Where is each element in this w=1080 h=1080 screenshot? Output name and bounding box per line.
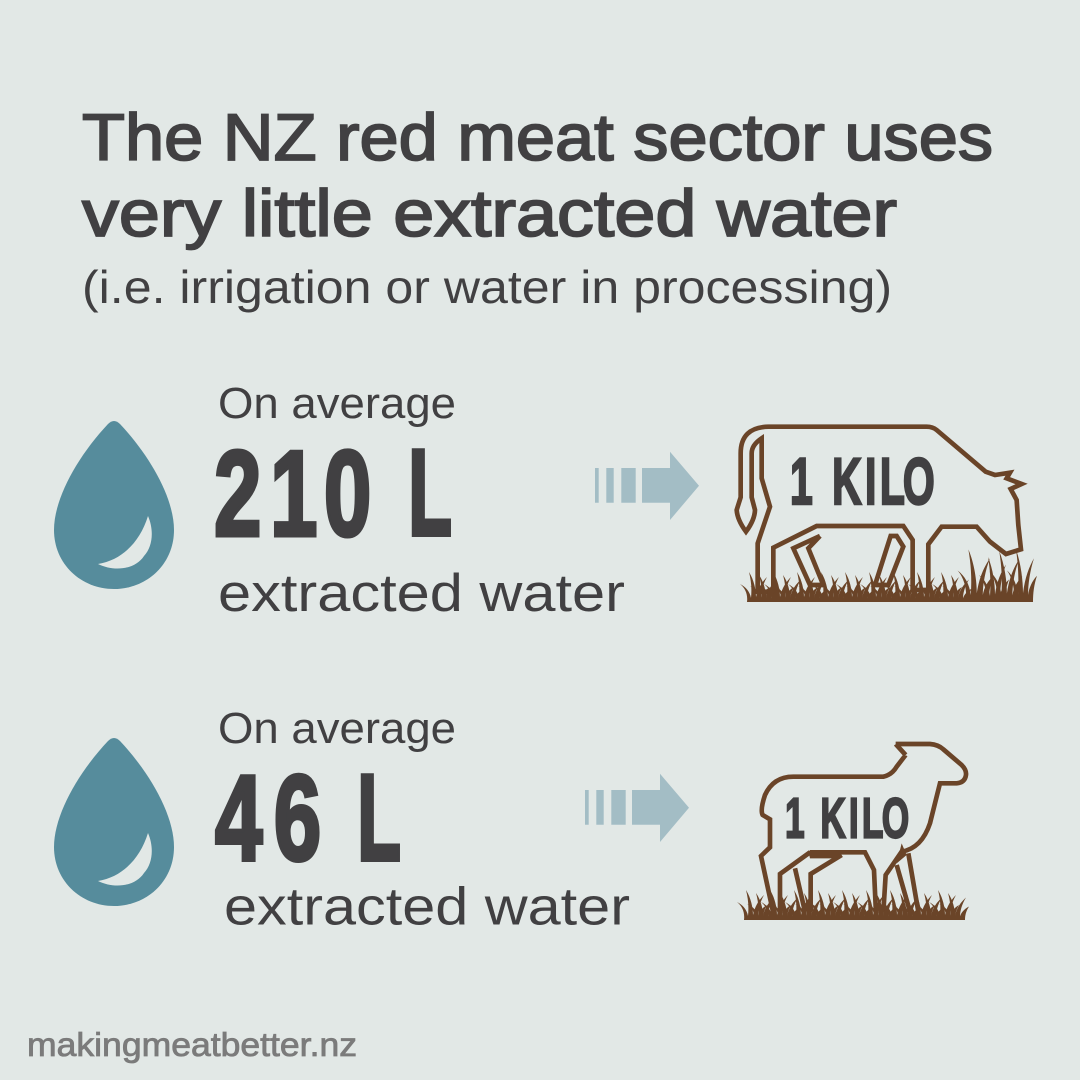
icon: cow with 1 kilo (737, 427, 1037, 602)
arrow (585, 774, 689, 842)
icon: sheep with 1 kilo (737, 744, 969, 920)
number: 46 L (215, 751, 401, 887)
label: 1 kilo: 1 KILO (790, 444, 935, 518)
number: 210 L: 210 (214, 427, 371, 562)
subtitle: (i.e. irrigation or water in processing) (82, 261, 892, 313)
number: 210 L (214, 426, 452, 562)
text: extracted water: extracted water (218, 564, 625, 623)
number: 210 L: L (408, 426, 452, 561)
text: on average: On average (218, 704, 456, 753)
title (82, 100, 993, 250)
icon: water drop (sheep) (54, 738, 174, 906)
number: 46 L: L (358, 751, 401, 886)
footer url: makingmeatbetter.nz (27, 1026, 357, 1063)
title: very little extracted water (82, 176, 897, 250)
number: 46 L: 46 (215, 751, 321, 887)
label: 1 kilo: 1 KILO (785, 787, 909, 851)
text: on average: On average (218, 379, 456, 428)
icon: water drop (beef) (54, 421, 174, 589)
panel: beef water use (54, 379, 1037, 623)
text: extracted water: extracted water (224, 878, 630, 936)
arrow (595, 452, 699, 520)
title: The NZ red meat sector uses (82, 100, 993, 174)
panel: sheep water use (54, 704, 969, 936)
grass (737, 890, 969, 920)
grass (740, 550, 1037, 602)
